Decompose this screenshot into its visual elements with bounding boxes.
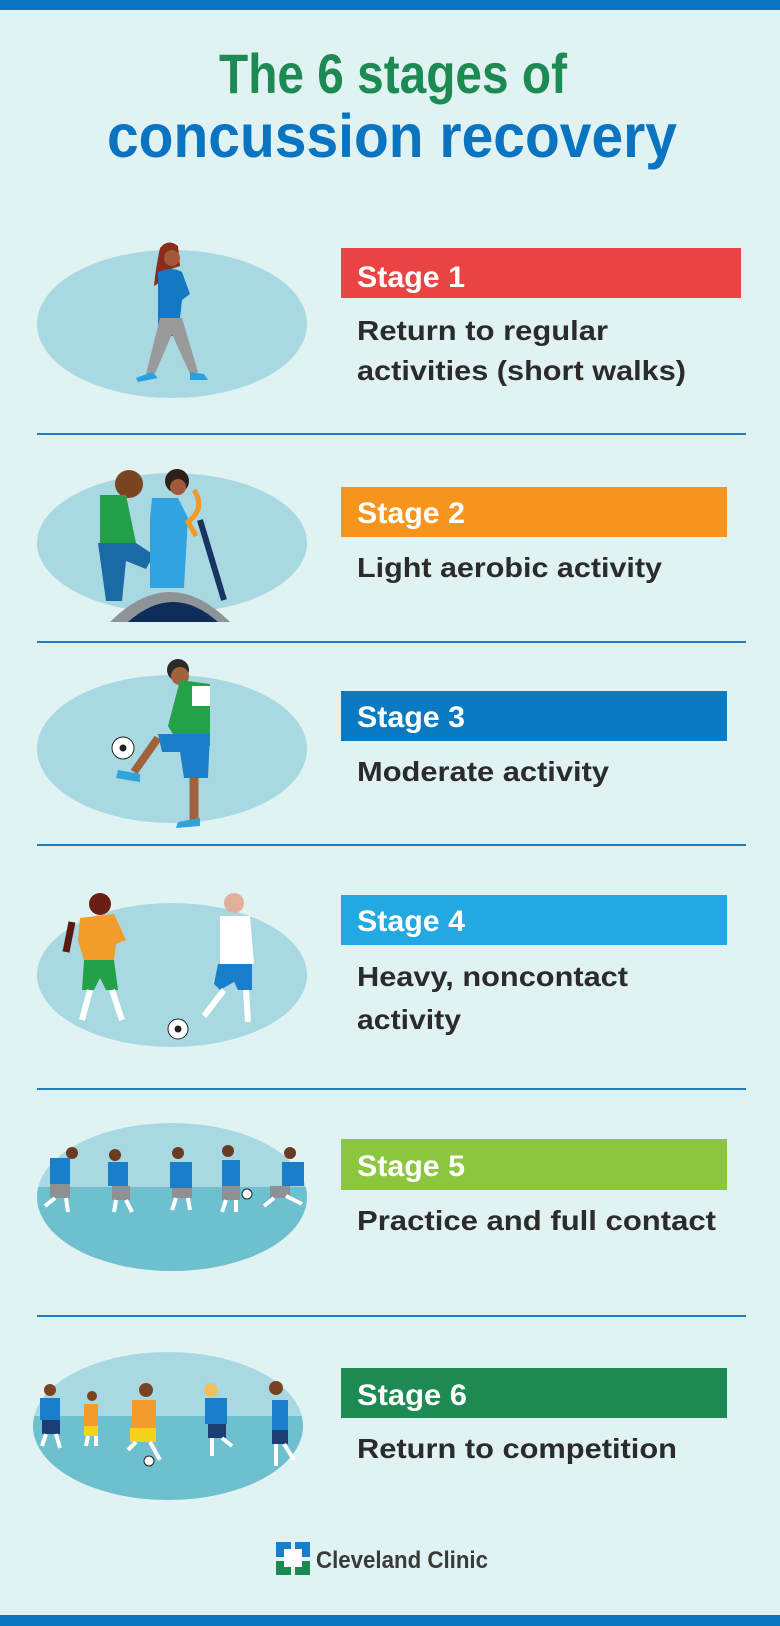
title: The 6 stages of (219, 42, 567, 105)
text: stage 5 description: Practice and full contact (357, 1205, 716, 1236)
panel: stage 6 (30, 1350, 727, 1510)
illustration: competition match (33, 1352, 303, 1500)
stage label 3 (341, 691, 727, 741)
illustration: exercise bike (37, 469, 307, 622)
panel: stage 3 (37, 659, 727, 828)
panel: stage 4 (37, 893, 727, 1047)
stage label 1: Stage 1 (357, 261, 465, 294)
stage label 4: Stage 4 (357, 905, 465, 938)
illustration: two soccer players (37, 893, 307, 1047)
text: stage 4 description: activity (357, 1004, 461, 1035)
stage label 2: Stage 2 (357, 497, 465, 530)
text: stage 2 description: Light aerobic activity (357, 552, 662, 583)
panel: stage 2 (37, 469, 727, 622)
illustration: team practice (37, 1123, 307, 1271)
stage label 1 (341, 248, 741, 298)
text: stage 4 description: Heavy, noncontact (357, 961, 628, 992)
text: stage 1 description (357, 315, 686, 386)
stage label 4 (341, 895, 727, 945)
illustration: walking woman (37, 242, 307, 398)
panel: stage 1 (37, 242, 741, 398)
stage label 5 (341, 1139, 727, 1190)
text: stage 4 description (357, 961, 628, 1035)
title: concussion recovery (107, 102, 677, 170)
text: stage 1 description: Return to regular (357, 315, 608, 346)
stage label 6 (341, 1368, 727, 1418)
logo: Cleveland Clinic: Cleveland Clinic (316, 1547, 488, 1574)
stage label 5: Stage 5 (357, 1150, 465, 1183)
text: stage 1 description: activities (short walks) (357, 355, 686, 386)
stage label 3: Stage 3 (357, 701, 465, 734)
text: stage 3 description: Moderate activity (357, 756, 609, 787)
stage label 2 (341, 487, 727, 537)
logo: Cleveland Clinic (276, 1542, 488, 1575)
illustration: ball juggling (37, 659, 307, 828)
title (107, 42, 677, 170)
text: stage 6 description: Return to competition (357, 1433, 677, 1464)
stage label 6: Stage 6 (357, 1379, 467, 1412)
panel: stage 5 (30, 1120, 727, 1280)
